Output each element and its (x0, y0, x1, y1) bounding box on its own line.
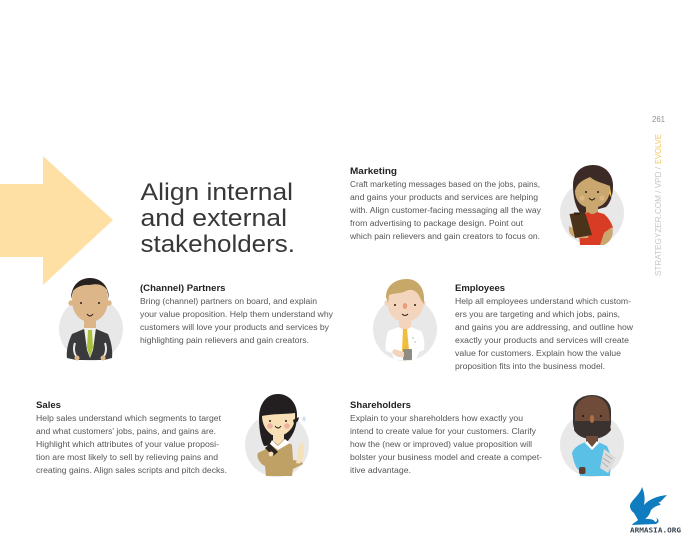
icon: employee man with mug (373, 279, 437, 362)
panel: employees text: and gains you are addressing, and outline how (455, 323, 633, 332)
panel: sales text: creating gains. Align sales scripts and pitch decks. (36, 466, 227, 475)
panel: sales text: Sales (36, 400, 61, 410)
panel: employees text: Employees (455, 283, 505, 293)
panel: partners text: (Channel) Partners (140, 283, 226, 293)
panel: employees text: value for customers. Explain how the value (455, 349, 622, 358)
icon: partner man in suit (59, 278, 123, 361)
icon: marketing woman (560, 165, 624, 245)
panel: partners text: Bring (channel) partners on board, and explain (140, 297, 317, 306)
arrow (0, 156, 113, 285)
panel: employees text (455, 283, 633, 371)
panel: marketing text: Marketing (350, 166, 397, 176)
panel: marketing text: Craft marketing messages based on the jobs, pains, (350, 180, 540, 189)
panel: marketing text: with. Align customer-facing messaging all the way (349, 206, 541, 215)
panel: sales text: tion are most likely to sell by relieving pains and (36, 453, 218, 462)
title (140, 180, 295, 258)
side label: EVOLVE (654, 134, 663, 164)
panel: partners text (140, 283, 333, 345)
title: and external (140, 206, 287, 232)
panel: employees text: proposition fits into the business model. (455, 362, 605, 371)
panel: marketing text: from advertising to package design. Point out (350, 219, 524, 228)
panel: partners text: your value proposition. Help them understand why (140, 310, 333, 319)
side label: STRATEGYZER.COM / VPD / (654, 166, 663, 276)
panel: employees text: Help all employees understand which custom- (455, 297, 631, 306)
panel: marketing text: and gains your products and services are helping (350, 193, 538, 202)
icon: sales woman with phone (245, 394, 309, 477)
panel: shareholders text: Shareholders (350, 400, 411, 410)
title: Align internal (140, 180, 293, 206)
title: stakeholders. (140, 232, 295, 258)
panel: shareholders text (350, 400, 542, 475)
page number: 261 (652, 115, 665, 124)
panel: marketing text: which pain relievers and gain creators to focus on. (349, 232, 540, 241)
icon: griffin logo (630, 487, 667, 525)
panel: shareholders text: how the (new or improved) value proposition will (350, 440, 532, 449)
panel: sales text: Help sales understand which segments to target (36, 414, 222, 423)
panel: partners text: highlighting pain relievers and gain creators. (140, 336, 309, 345)
panel: shareholders text: Explain to your shareholders how exactly you (350, 414, 523, 423)
panel: employees text: exactly your products and services will create (455, 336, 630, 345)
panel: sales text (36, 400, 227, 475)
panel: shareholders text: bolster your business model and create a compet- (350, 453, 542, 462)
panel: shareholders text: itive advantage. (350, 466, 411, 475)
panel: marketing text (349, 166, 541, 241)
panel: employees text: ers you are targeting and which jobs, pains, (455, 310, 620, 319)
logo text: ARMASIA.ORG (630, 526, 681, 534)
panel: shareholders text: intend to create value for your customers. Clarify (350, 427, 536, 436)
panel: partners text: customers will love your products and services by (140, 323, 329, 332)
icon: shareholder bearded man (560, 395, 624, 477)
panel: sales text: and what customers' jobs, pains, and gains are. (36, 427, 216, 436)
panel: sales text: Highlight which attributes of your value proposi- (36, 440, 219, 449)
